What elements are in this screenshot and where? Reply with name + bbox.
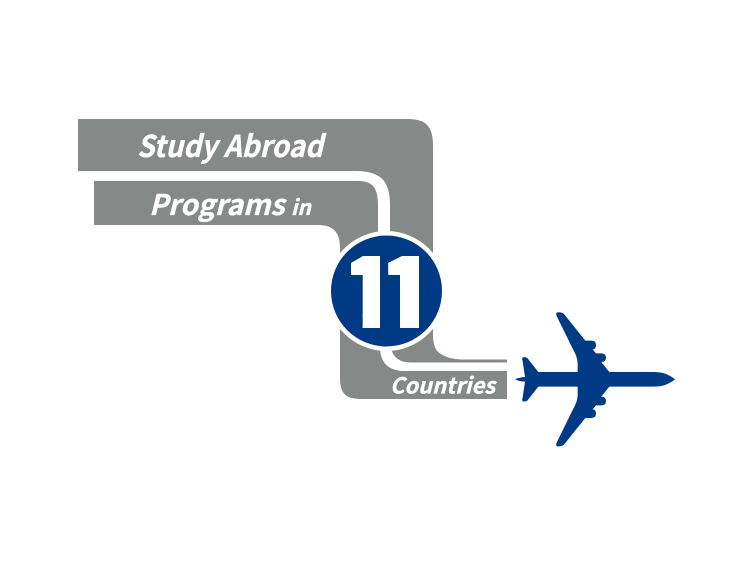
upper grey ribbon bbox=[78, 119, 507, 362]
number badge: 11: 11 bbox=[340, 215, 438, 357]
label: Countries: Countries bbox=[390, 368, 497, 400]
icon: airplane bbox=[515, 312, 675, 446]
heading: Programs in: in bbox=[291, 192, 312, 222]
heading: Study Abroad: Study Abroad bbox=[137, 122, 326, 166]
lower grey ribbon bbox=[94, 181, 507, 399]
heading: Programs in: Programs bbox=[149, 183, 287, 224]
